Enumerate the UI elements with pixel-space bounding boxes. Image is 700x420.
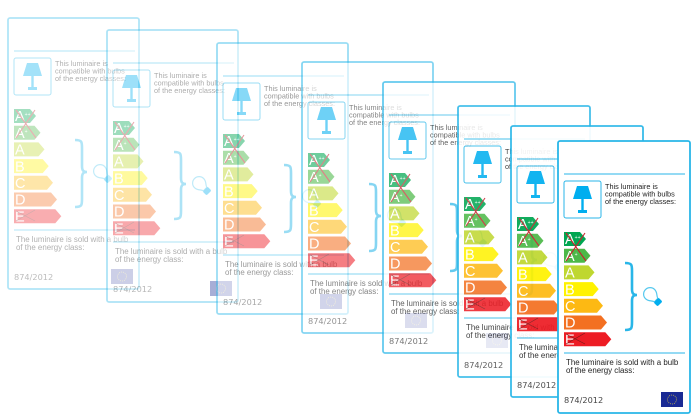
regulation number: 874/2012 (517, 380, 556, 390)
energy class bars: A (309, 153, 319, 169)
compatibility text: compatible with bulbs (505, 154, 575, 164)
energy class bars (14, 109, 61, 225)
EU flag (614, 377, 636, 392)
energy class bars: D (518, 301, 528, 317)
energy class bars: A (518, 234, 528, 250)
icon: bulb (641, 285, 665, 309)
energy class bars: D (390, 257, 400, 273)
brace (174, 152, 186, 219)
energy class bars (517, 217, 564, 333)
energy class bars: C (518, 284, 528, 300)
energy class bars: + (124, 141, 127, 147)
brace (525, 228, 537, 295)
icon: lamp (464, 146, 501, 183)
icon: bulb (190, 174, 214, 198)
label card 2 (107, 30, 238, 302)
energy class bars (113, 121, 160, 237)
compatibility text: compatible with bulbs (55, 66, 125, 76)
energy class bars: E (15, 209, 25, 225)
energy class bars: D (224, 218, 234, 234)
energy class bars: E (465, 297, 475, 313)
regulation number: 874/2012 (113, 284, 152, 294)
energy class bars: A (309, 170, 319, 186)
energy class bars: A (114, 138, 124, 154)
compatibility text: compatible with bulbs (264, 92, 334, 100)
energy class bars: + (234, 154, 237, 160)
energy class bars: E (518, 317, 528, 333)
energy class bars: ++ (400, 176, 406, 182)
energy class bars: A (224, 168, 234, 184)
energy class bars: A (309, 187, 319, 203)
sold-with text: of the energy class: (115, 255, 183, 264)
energy class bars: ++ (528, 220, 534, 226)
compatibility text: of the energy classes: (558, 182, 629, 191)
sold-with text: The luminaire is sold with a bulb (566, 358, 679, 367)
compatibility text: of the energy classes: (605, 197, 676, 206)
energy class bars: A (565, 232, 575, 248)
energy class bars: A (465, 214, 475, 230)
energy class bars: A (114, 155, 124, 171)
sold-with text: of the energy class: (16, 243, 84, 252)
icon: bulb (91, 162, 115, 186)
sold-with text: of the energy class: (466, 331, 534, 340)
compatibility text: This luminaire is (505, 147, 558, 156)
regulation number: 874/2012 (564, 395, 603, 405)
sold-with text: The luminaire is sold with a bulb (115, 247, 228, 256)
label card 4 (302, 62, 433, 333)
label card 8 (front, fully opaque) (558, 141, 690, 413)
compatibility text: of the energy classes: (505, 162, 576, 171)
compatibility text: of the energy classes: (154, 86, 225, 95)
compatibility text: This luminaire is (430, 123, 483, 132)
energy class bars: B (565, 282, 575, 298)
brace (625, 263, 637, 330)
sold-with text: of the energy class: (391, 307, 459, 316)
brace (369, 184, 381, 251)
regulation number: 874/2012 (389, 336, 428, 346)
energy class bars: B (15, 159, 25, 175)
energy class bars: B (114, 171, 124, 187)
energy class bars: + (25, 129, 28, 135)
energy class bars: D (114, 205, 124, 221)
icon: lamp (308, 102, 345, 139)
sold-with text: The luminaire is sold with a bulb (16, 235, 129, 244)
brace (450, 204, 462, 271)
energy class bars: D (309, 237, 319, 253)
energy class bars: A (114, 121, 124, 137)
label card 1 (most faded) (8, 18, 139, 289)
energy class bars: E (114, 221, 124, 237)
label card 7 (511, 126, 643, 397)
energy class bars: B (309, 203, 319, 219)
brace (578, 248, 590, 315)
energy class bars: A (465, 197, 475, 213)
icon: lamp (113, 70, 150, 107)
energy class bars: A (15, 126, 25, 142)
energy class bars: D (465, 281, 475, 297)
compatibility text: This luminaire is (349, 103, 402, 112)
energy class bars: A (465, 231, 475, 247)
energy class bars: C (390, 240, 400, 256)
energy class bars: A (565, 266, 575, 282)
energy class bars: ++ (234, 137, 240, 143)
energy class bars: + (319, 173, 322, 179)
compatibility text: of the energy classes: (430, 138, 501, 147)
compatibility text: compatible with bulbs (430, 130, 500, 140)
energy class bars: E (309, 253, 319, 269)
energy class bars: E (224, 234, 234, 250)
label card 5 (383, 82, 515, 353)
energy class bars: A (224, 134, 234, 150)
compatibility text: This luminaire is (55, 59, 108, 68)
energy class bars: ++ (319, 156, 325, 162)
compatibility text: compatible with bulbs (154, 78, 224, 88)
energy class bars: + (475, 217, 478, 223)
icon: lamp (389, 122, 426, 159)
EU flag (320, 294, 342, 309)
sold-with text: The luminaire is sold with a bulb (310, 279, 423, 288)
energy class bars: ++ (575, 235, 581, 241)
icon: bulb (541, 250, 565, 274)
regulation number: 874/2012 (14, 272, 53, 282)
EU flag (661, 392, 683, 407)
energy class bars (223, 134, 270, 250)
brace (284, 165, 296, 232)
energy class bars (464, 197, 511, 313)
energy class bars: A (390, 207, 400, 223)
icon: lamp (223, 83, 260, 120)
energy class bars: C (309, 220, 319, 236)
energy class bars: ++ (475, 200, 481, 206)
EU flag (405, 313, 427, 328)
energy class bars: ++ (124, 124, 130, 130)
sold-with text: The luminaire is sold with a bulb (225, 260, 338, 269)
energy class bars: B (465, 247, 475, 263)
regulation number: 874/2012 (308, 316, 347, 326)
icon: bulb (300, 187, 324, 211)
compatibility text: of the energy classes: (349, 118, 420, 127)
EU flag (210, 281, 232, 296)
energy class bars: + (400, 193, 403, 199)
compatibility text: This luminaire is (154, 71, 207, 80)
label card 6 (458, 106, 590, 377)
icon: lamp (564, 181, 601, 218)
energy class bars (308, 153, 355, 269)
compatibility text: compatible with bulbs (605, 190, 675, 198)
compatibility text: This luminaire is (264, 84, 317, 93)
energy class bars: A (390, 190, 400, 206)
sold-with text: The luminaire is sold with a bulb (391, 299, 504, 308)
icon: bulb (385, 206, 409, 230)
EU flag (486, 333, 508, 348)
icon: lamp (14, 58, 51, 95)
sold-with text: The luminaire is sold with a bulb (519, 343, 632, 352)
energy class bars: ++ (25, 112, 31, 118)
sold-with text: of the energy class: (566, 366, 634, 375)
icon: bulb (466, 226, 490, 250)
compatibility text: of the energy classes: (264, 99, 335, 108)
regulation number: 874/2012 (464, 360, 503, 370)
compatibility text: This luminaire is (605, 182, 658, 191)
energy class bars: D (15, 193, 25, 209)
sold-with text: of the energy class: (310, 287, 378, 296)
energy class bars: C (465, 264, 475, 280)
regulation number: 874/2012 (223, 297, 262, 307)
energy class bars: C (224, 201, 234, 217)
energy class bars: D (565, 316, 575, 332)
compatibility text: compatible with bulbs (558, 174, 628, 184)
energy class bars (564, 232, 611, 348)
energy class bars: E (390, 273, 400, 289)
energy class bars (389, 173, 436, 289)
EU flag (111, 269, 133, 284)
EU flag (561, 357, 583, 372)
energy class bars: C (15, 176, 25, 192)
compatibility text: of the energy classes: (55, 74, 126, 83)
brace (75, 140, 87, 207)
compatibility text: This luminaire is (558, 167, 611, 176)
icon: bulb (594, 270, 618, 294)
energy class bars: A (15, 143, 25, 159)
energy class bars: A (565, 249, 575, 265)
energy class bars: A (518, 251, 528, 267)
icon: lamp (517, 166, 554, 203)
energy class bars: E (565, 332, 575, 348)
energy class bars: B (518, 267, 528, 283)
energy class bars: C (565, 299, 575, 315)
energy class bars: B (224, 184, 234, 200)
label card 3 (217, 43, 348, 314)
energy class bars: A (390, 173, 400, 189)
energy class bars: C (114, 188, 124, 204)
sold-with text: The luminaire is sold with a bulb (466, 323, 579, 332)
energy class bars: A (224, 151, 234, 167)
compatibility text: compatible with bulbs (349, 110, 419, 120)
energy class bars: + (575, 252, 578, 258)
energy class bars: A (518, 217, 528, 233)
energy class bars: A (15, 109, 25, 125)
energy class bars: + (528, 237, 531, 243)
sold-with text: of the energy class: (225, 268, 293, 277)
energy class bars: B (390, 223, 400, 239)
sold-with text: of the energy class: (519, 351, 587, 360)
